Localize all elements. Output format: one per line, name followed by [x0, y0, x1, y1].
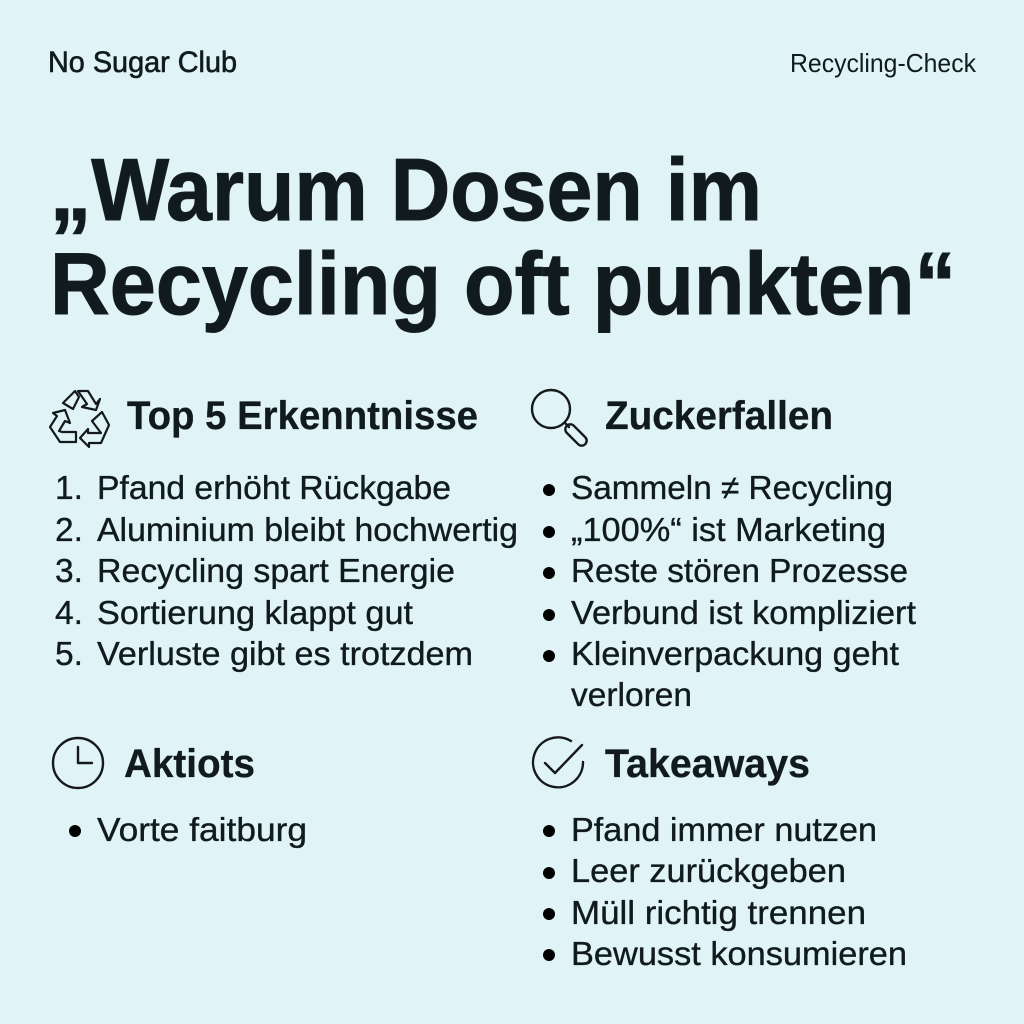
numbered list: [55, 470, 518, 673]
bullet list: [543, 470, 917, 714]
bullet list: Kleinverpackung geht: [571, 636, 900, 673]
panel: Zuckerfallen: [532, 390, 917, 714]
bullet list: Leer zurückgeben: [571, 853, 846, 890]
icon: clock: [53, 738, 103, 788]
title: Recycling oft punkten“: [50, 234, 956, 333]
icon: magnifying glass: [532, 390, 589, 448]
numbered list: Verluste gibt es trotzdem: [97, 636, 473, 673]
bullet list: verloren: [571, 677, 692, 714]
numbered list: Recycling spart Energie: [97, 553, 455, 590]
title: [50, 140, 956, 333]
bullet list: Reste stören Prozesse: [571, 553, 908, 590]
numbered list: 3.: [55, 553, 83, 590]
panel: Aktiots: [53, 738, 307, 849]
heading: Top 5 Erkenntnisse: [127, 394, 478, 438]
panel: Top 5 Erkenntnisse: [50, 391, 518, 673]
bullet list: „100%“ ist Marketing: [571, 512, 886, 549]
title: „Warum Dosen im: [50, 140, 762, 239]
bullet list: Verbund ist kompliziert: [571, 595, 917, 632]
bullet list: Vorte faitburg: [97, 812, 307, 849]
numbered list: 1.: [55, 470, 83, 507]
bullet list: Sammeln ≠ Recycling: [571, 470, 893, 507]
numbered list: 4.: [55, 595, 83, 632]
heading: Takeaways: [605, 742, 810, 786]
numbered list: 5.: [55, 636, 83, 673]
top right label: Recycling-Check: [790, 48, 977, 78]
bullet list: Bewusst konsumieren: [571, 936, 907, 973]
heading: Aktiots: [124, 742, 255, 786]
numbered list: Sortierung klappt gut: [97, 595, 414, 632]
bullet list: Pfand immer nutzen: [571, 812, 877, 849]
bullet list: Müll richtig trennen: [571, 895, 866, 932]
numbered list: Pfand erhöht Rückgabe: [97, 470, 451, 507]
bullet list: [543, 812, 907, 973]
numbered list: 2.: [55, 512, 83, 549]
icon: recycling: [50, 391, 109, 447]
panel: Takeaways: [533, 737, 907, 973]
brand name: No Sugar Club: [48, 46, 237, 79]
icon: check circle: [533, 737, 583, 787]
numbered list: Aluminium bleibt hochwertig: [97, 512, 518, 549]
heading: Zuckerfallen: [605, 394, 833, 438]
